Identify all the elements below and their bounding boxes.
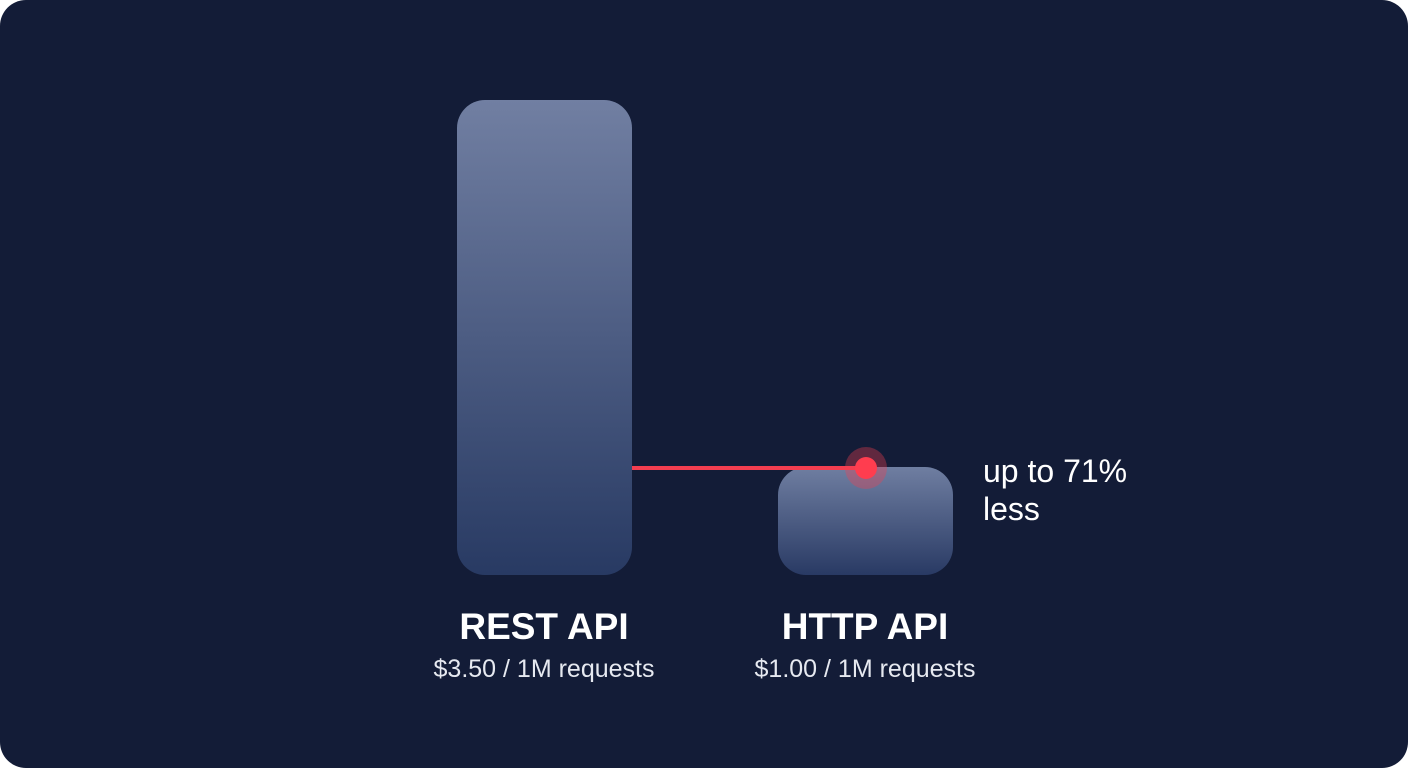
callout: savings text: less xyxy=(983,491,1040,527)
connector line xyxy=(632,466,866,470)
callout: savings text: up to 71% xyxy=(983,453,1127,489)
bar: REST API xyxy=(457,100,632,575)
label: REST API: REST API xyxy=(459,606,629,647)
marker dot with glow xyxy=(845,447,887,489)
label: HTTP API xyxy=(754,606,975,683)
label: HTTP API: $1.00 / 1M requests xyxy=(755,655,975,683)
label: REST API xyxy=(434,606,654,683)
bar: HTTP API xyxy=(778,467,953,575)
callout: savings text xyxy=(983,453,1127,527)
label: HTTP API: HTTP API xyxy=(782,606,948,647)
label: REST API: $3.50 / 1M requests xyxy=(434,655,654,683)
